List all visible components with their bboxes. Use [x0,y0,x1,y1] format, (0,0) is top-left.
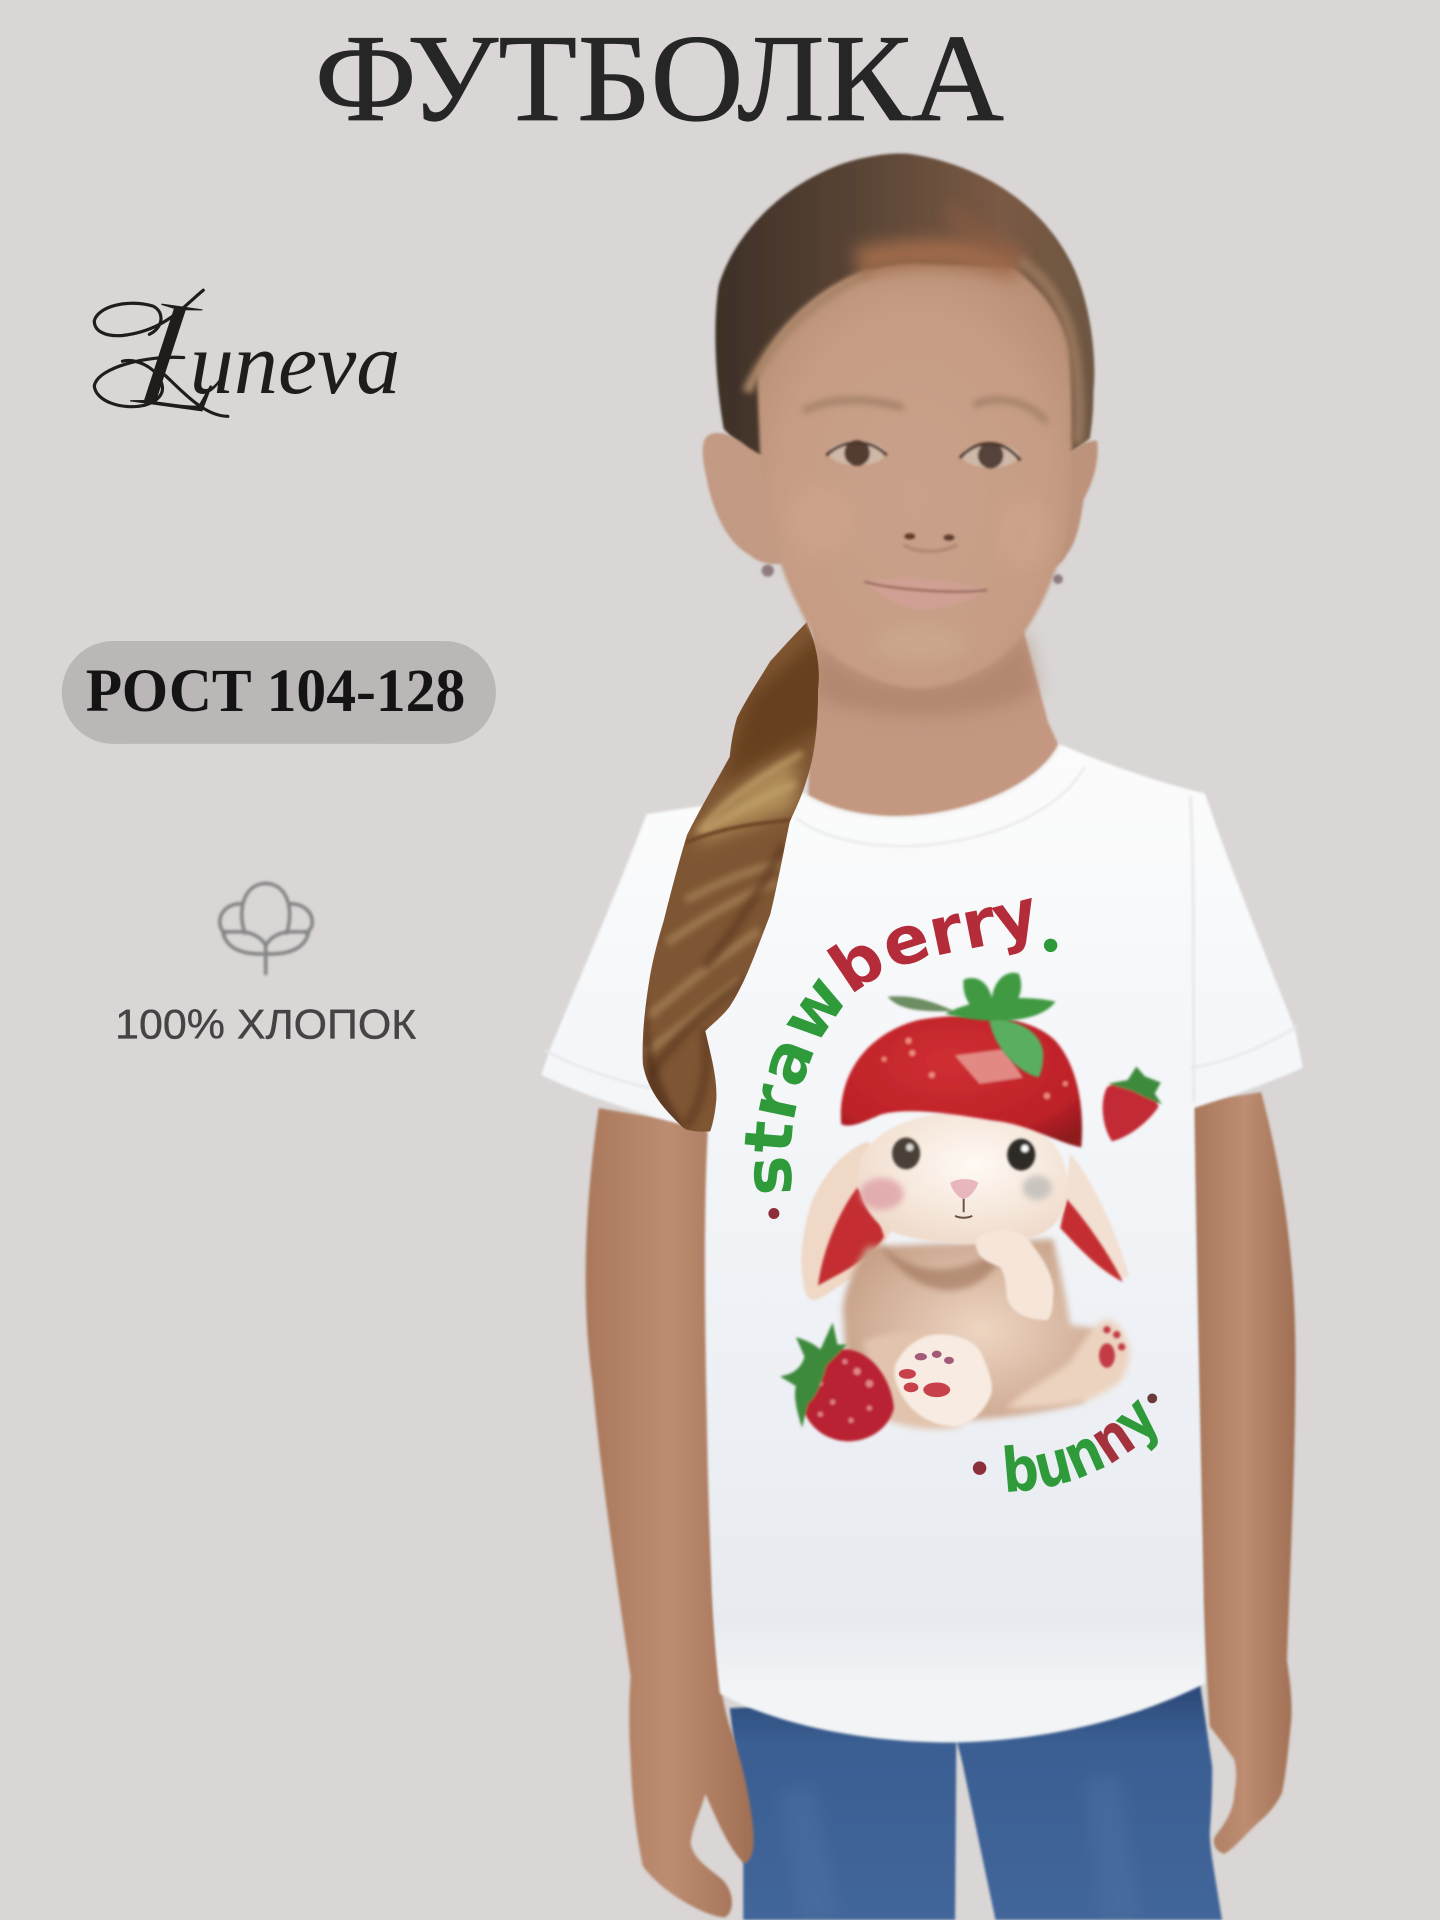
bunny illustration [780,973,1162,1441]
earrings [762,564,1063,584]
brand logo: Luneva: L [123,263,237,450]
left arm [586,1108,754,1918]
print dots [768,939,1157,1475]
t-shirt [541,744,1303,1743]
strawberry hat [841,1016,1082,1147]
bunny nose and mouth [950,1179,978,1218]
head [703,154,1098,688]
left ear [801,1141,892,1300]
strawberry bottom left [780,1322,894,1441]
chest shading [876,1239,1010,1290]
right arm [1194,1092,1296,1854]
paw at chin [976,1230,1053,1320]
brand logo: Luneva [94,263,400,450]
ears [703,433,1098,567]
left paw pads [899,1351,954,1397]
t-shirt print: strawberry bunny [744,898,1163,1492]
hat leaves [888,973,1056,1078]
fringe strands [747,211,1079,443]
hair [715,154,1094,456]
neck shadow [813,631,1038,716]
head [858,1111,1068,1244]
icon: cotton boll [220,883,312,973]
left foot [894,1334,992,1427]
eyes and brows [803,400,1047,468]
right leg and foot [1007,1319,1130,1408]
material label: 100% ХЛОПОК [115,1000,416,1047]
neck [808,624,1060,823]
title: ФУТБОЛКА [315,10,1004,148]
bunny eyes [892,1138,1035,1171]
cheeks [860,1178,904,1210]
height badge [62,641,496,744]
print text: bunny: bunny [1004,1399,1158,1492]
nose [904,533,958,551]
left leg [863,1331,961,1429]
photo: girl in t-shirt [541,152,1304,1920]
body [843,1239,1096,1421]
right ear [1060,1153,1129,1278]
cheek highlights [789,484,1049,661]
ponytail [642,622,819,1132]
mouth [864,577,987,610]
strawberry right [1103,1067,1162,1141]
height badge: РОСТ 104-128 [86,657,465,725]
print text: strawberry: strawberry [744,898,1032,1192]
face [757,263,1072,688]
jeans [730,1684,1222,1920]
brand logo: Luneva: uneva [190,315,400,413]
right paw pads [1099,1326,1125,1368]
